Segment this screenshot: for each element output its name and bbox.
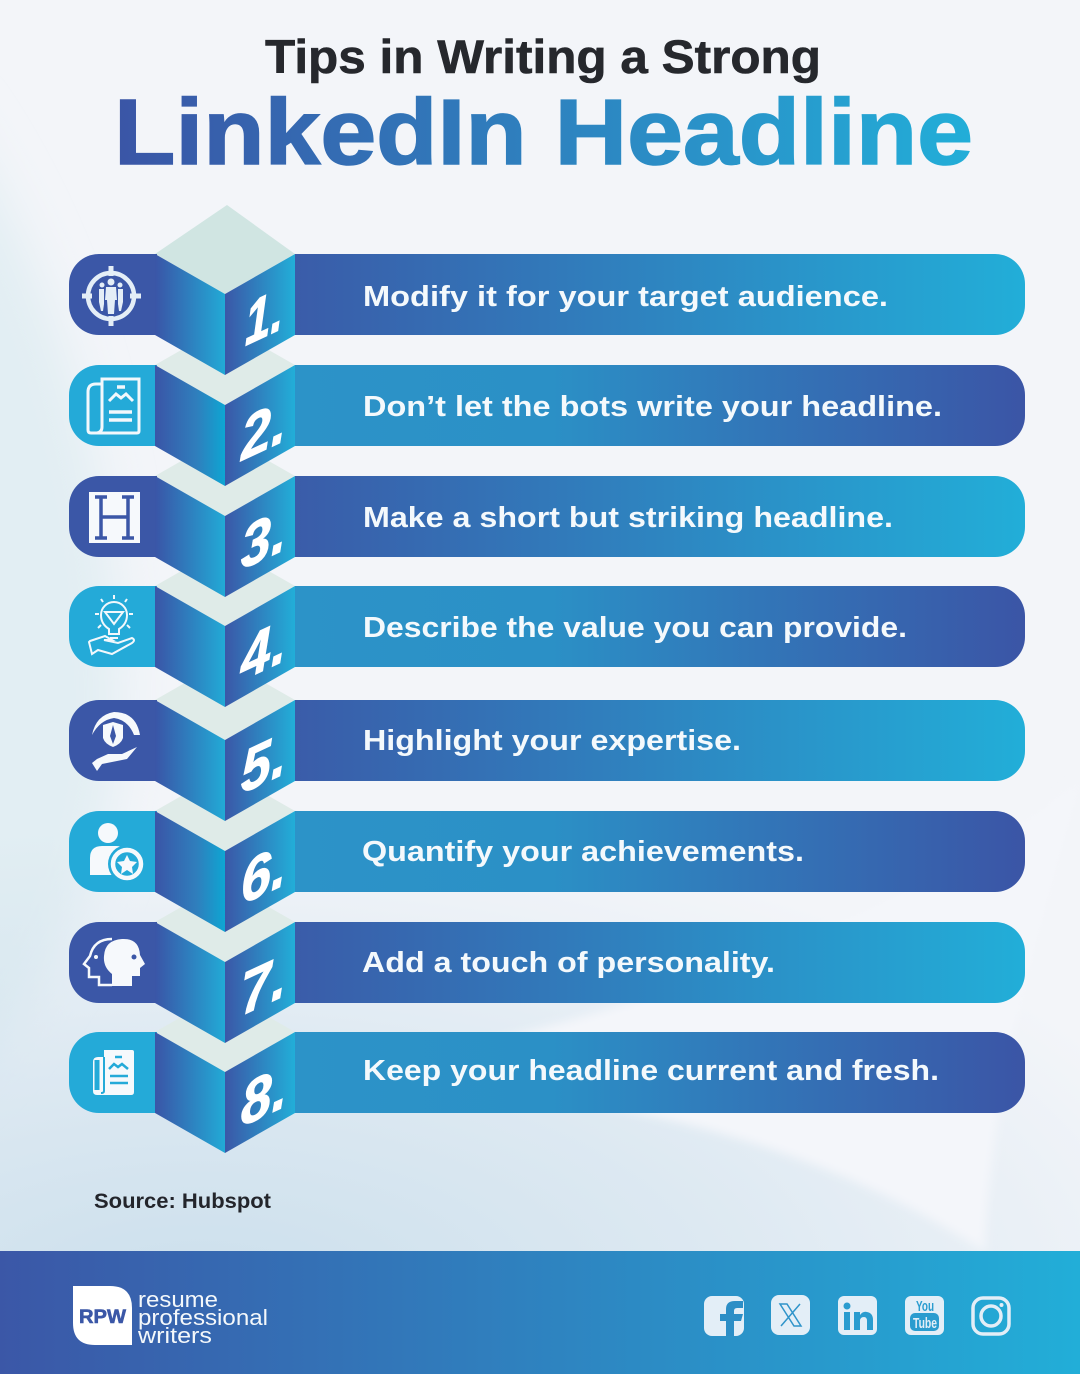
icon: target audience [82, 266, 141, 326]
logo initials: RPW [79, 1307, 126, 1328]
fold right [225, 254, 295, 375]
fold right [225, 1032, 295, 1153]
number: 3. [241, 496, 286, 583]
left tab [69, 586, 157, 667]
left tab [69, 254, 157, 335]
tip text: Make a short but striking headline. [363, 502, 893, 534]
number: 2. [240, 387, 286, 475]
icon: youtube: You [916, 1298, 934, 1315]
logo word 1: resume [138, 1287, 218, 1312]
fold left [155, 700, 225, 821]
icon: expertise in hand [92, 712, 140, 771]
tip text: Highlight your expertise. [363, 725, 741, 757]
bar [295, 922, 1025, 1003]
logo mark [73, 1286, 132, 1345]
tip text: Modify it for your target audience. [363, 281, 888, 313]
source note: Source: Hubspot [94, 1190, 271, 1213]
icon: idea in hand [89, 595, 134, 654]
title line 1: Tips in Writing a Strong [265, 30, 821, 83]
bar [295, 811, 1025, 892]
fold right [225, 476, 295, 597]
fold left [155, 811, 225, 932]
left tab [69, 922, 157, 1003]
icon: document [88, 379, 139, 433]
tip 4 [69, 586, 1025, 707]
tip 2 [69, 365, 1025, 486]
icon: letter H [89, 492, 140, 543]
title [114, 30, 973, 184]
tip 6 [69, 811, 1025, 932]
icon: facebook [704, 1296, 744, 1336]
icon: youtube [905, 1296, 944, 1335]
tip text: Keep your headline current and fresh. [363, 1055, 939, 1087]
left tab [69, 700, 157, 781]
fold right [225, 811, 295, 932]
icon: youtube: Tube [913, 1315, 937, 1332]
fold left [155, 1032, 225, 1153]
left tab [69, 1032, 157, 1113]
number: 7. [241, 942, 286, 1029]
title line 2: LinkedIn Headline [114, 80, 973, 184]
left tab [69, 365, 157, 446]
number: 1. [245, 275, 283, 359]
number: 4. [239, 607, 286, 695]
icon: two heads [84, 939, 145, 986]
bar [295, 1032, 1025, 1113]
logo word 3: writers [137, 1323, 212, 1348]
fold left [155, 254, 225, 375]
fold left [155, 586, 225, 707]
fold left [155, 476, 225, 597]
icon: linkedin [838, 1296, 877, 1335]
bar [295, 476, 1025, 557]
tip text: Quantify your achievements. [362, 836, 804, 868]
footer band [0, 1251, 1080, 1374]
fold right [225, 586, 295, 707]
icon: X [771, 1295, 810, 1335]
tip 5 [69, 700, 1025, 821]
icon: news sheet [93, 1050, 134, 1095]
tip 1 [69, 254, 1025, 375]
fold left [155, 365, 225, 486]
tip text: Add a touch of personality. [362, 947, 775, 979]
tip text: Don’t let the bots write your headline. [363, 391, 942, 423]
fold left [155, 922, 225, 1043]
bar [295, 365, 1025, 446]
logo word 2: professional [138, 1305, 268, 1330]
fold right [225, 922, 295, 1043]
chevron top diamonds [155, 205, 295, 1072]
icon: person with badge [90, 823, 146, 883]
bar [295, 700, 1025, 781]
logo [73, 1286, 268, 1348]
number: 6. [241, 831, 286, 918]
left tab [69, 811, 157, 892]
number: 5. [241, 720, 286, 807]
tip 8 [69, 1032, 1025, 1153]
number: 8. [241, 1052, 287, 1140]
left tab [69, 476, 157, 557]
icon: instagram [973, 1298, 1009, 1334]
tip text: Describe the value you can provide. [363, 612, 907, 644]
bar [295, 586, 1025, 667]
tip 3 [69, 476, 1025, 597]
bar [295, 254, 1025, 335]
fold right [225, 700, 295, 821]
fold right [225, 365, 295, 486]
tip 7 [69, 922, 1025, 1043]
